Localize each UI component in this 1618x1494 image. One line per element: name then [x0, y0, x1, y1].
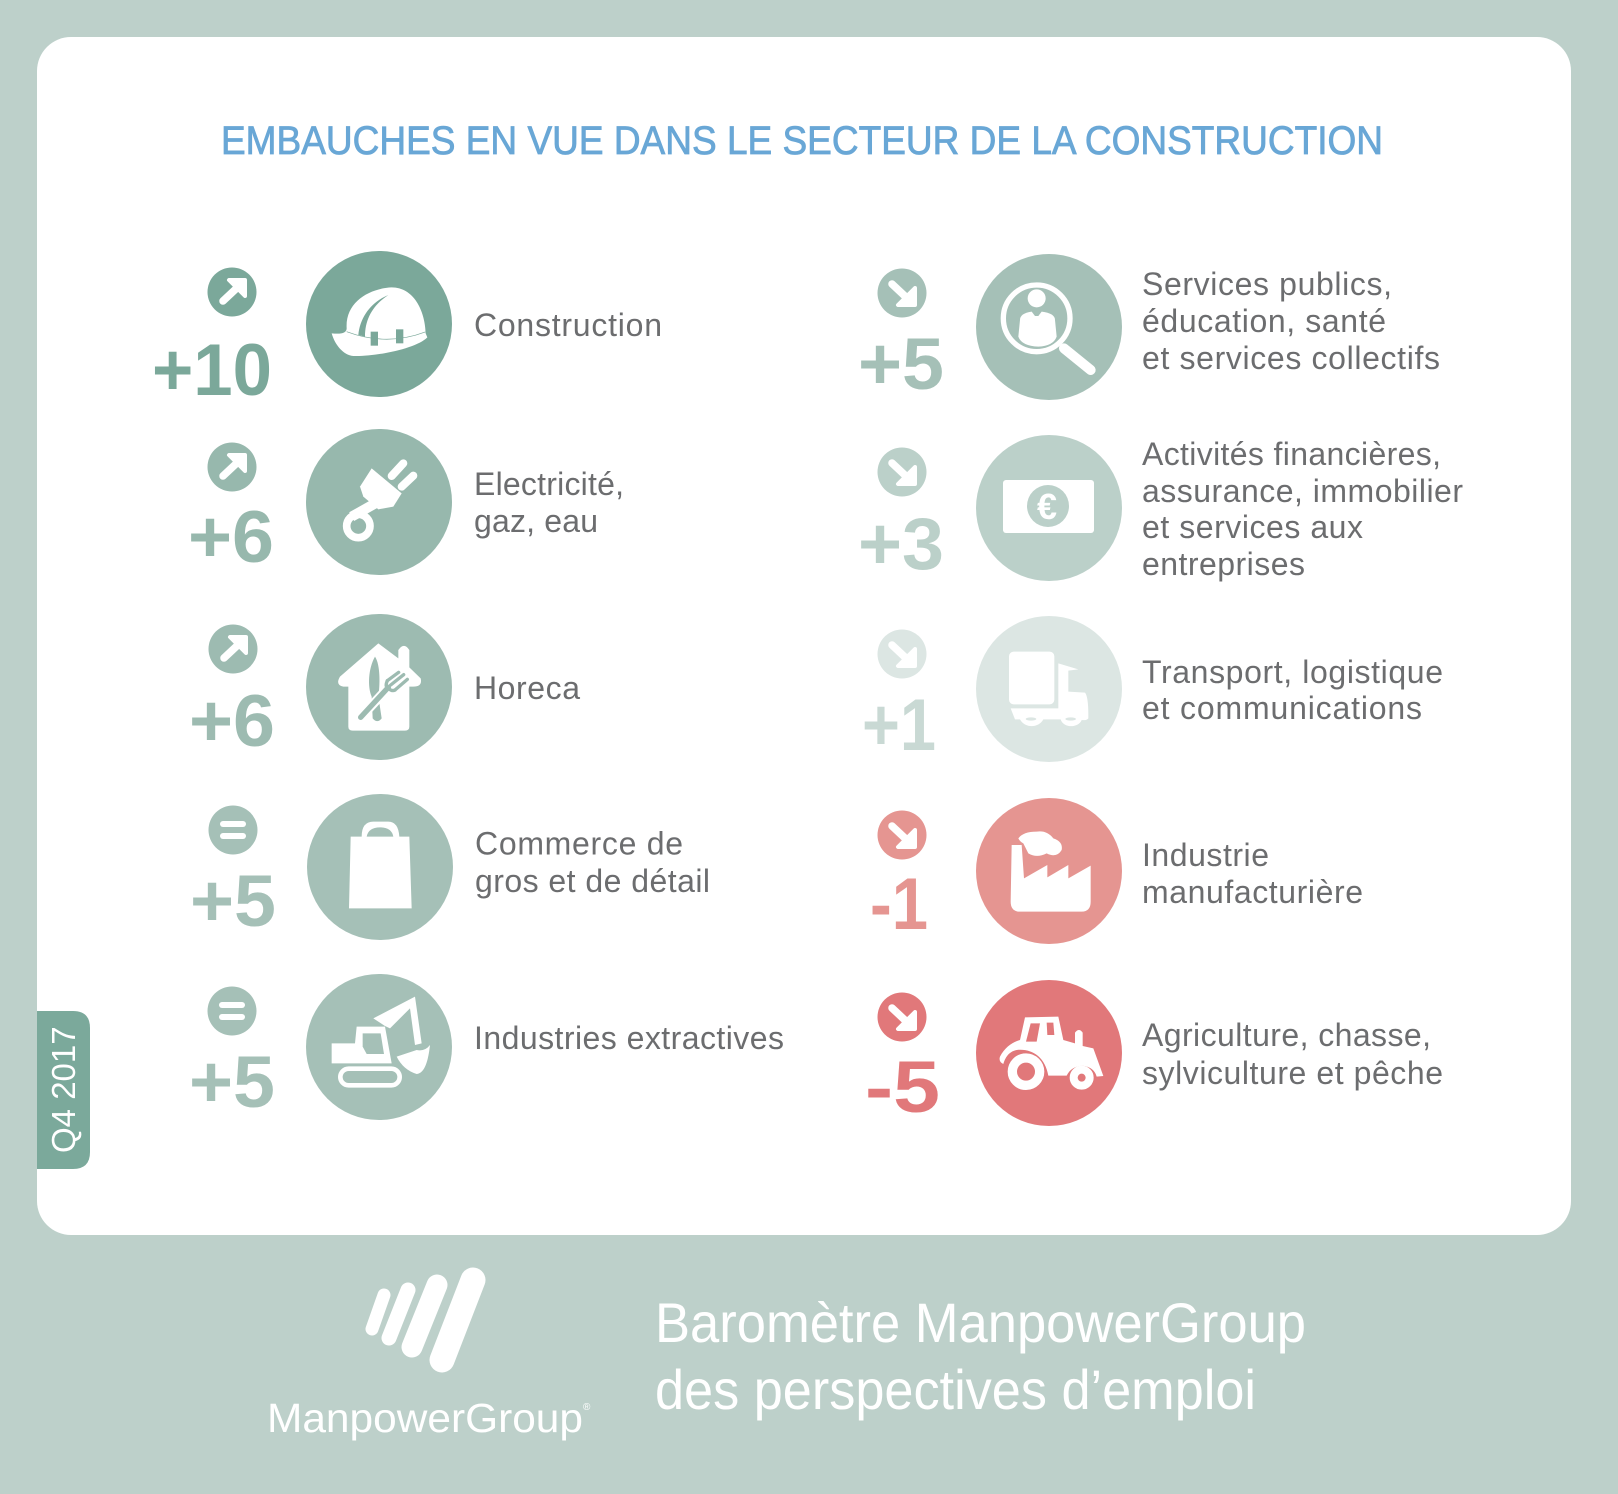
label: Industries extractives	[474, 1020, 784, 1056]
title: EMBAUCHES EN VUE DANS LE SECTEUR DE LA CONSTRUCTION	[221, 119, 1383, 163]
icon: magnifier with person	[976, 254, 1122, 400]
value: +1: +1	[862, 685, 936, 766]
label: gaz, eau	[474, 503, 598, 539]
label: Electricité,	[474, 466, 624, 502]
icon: banknote: €	[1037, 486, 1057, 527]
registered mark: ®	[583, 1402, 591, 1413]
icon: shopping bag	[307, 794, 453, 940]
footer heading: Baromètre ManpowerGroup	[655, 1291, 1306, 1354]
icon: tractor	[976, 980, 1122, 1126]
icon: hard hat	[306, 251, 452, 397]
row: Commerce	[190, 794, 710, 942]
trend badge: down	[878, 630, 926, 678]
value: +6: +6	[188, 497, 274, 578]
row: Agriculture	[865, 980, 1443, 1128]
icon: house with cutlery	[306, 614, 452, 760]
logo wordmark: ManpowerGroup	[267, 1395, 583, 1441]
label: gros et de détail	[475, 863, 710, 899]
label: Services publics,	[1142, 266, 1392, 302]
trend badge: down	[878, 268, 926, 318]
row: Transport	[862, 616, 1443, 766]
label: sylviculture et pêche	[1142, 1055, 1443, 1091]
trend badge: up	[208, 442, 256, 492]
value: +5: +5	[190, 861, 276, 942]
trend badge: down	[878, 448, 926, 496]
value: +3: +3	[858, 504, 944, 585]
label	[1142, 436, 1463, 582]
row: Construction	[152, 251, 662, 411]
value: +10: +10	[152, 330, 272, 411]
footer heading: des perspectives d’emploi	[655, 1358, 1256, 1421]
icon: excavator	[306, 974, 452, 1120]
trend badge: down	[878, 992, 926, 1042]
row: Industrie manufacturière	[870, 798, 1363, 945]
label	[1142, 266, 1440, 376]
label: assurance, immobilier	[1142, 473, 1463, 509]
value: -1: -1	[870, 864, 928, 945]
icon: plug	[306, 429, 452, 575]
icon: factory	[976, 798, 1122, 944]
label: Industrie	[1142, 837, 1269, 873]
label	[1142, 837, 1363, 910]
icon: truck	[976, 616, 1122, 762]
label: Construction	[474, 307, 662, 343]
label	[1142, 1017, 1443, 1091]
icon: banknote	[976, 435, 1122, 581]
row: Electricité	[188, 429, 624, 578]
row: Horeca	[189, 614, 580, 762]
trend badge: up	[208, 268, 256, 316]
footer heading	[655, 1291, 1306, 1421]
label: et communications	[1142, 690, 1422, 726]
value: +5: +5	[858, 324, 944, 405]
label: et services aux	[1142, 509, 1363, 545]
value: -5: -5	[865, 1047, 940, 1128]
side tab: Q4 2017: Q4 2017	[45, 1026, 82, 1153]
panel: white card	[37, 37, 1571, 1235]
value: +6: +6	[189, 681, 275, 762]
row: Services publics	[858, 254, 1440, 405]
label: manufacturière	[1142, 874, 1363, 910]
row: Industries extractives	[189, 974, 784, 1123]
label	[1142, 654, 1443, 726]
side tab: Q4 2017	[37, 1011, 90, 1169]
row: Activités financières	[858, 435, 1463, 585]
label: entreprises	[1142, 546, 1305, 582]
trend badge: equal	[208, 806, 258, 854]
label: Agriculture, chasse,	[1142, 1017, 1431, 1053]
label: Activités financières,	[1142, 436, 1441, 472]
logo mark	[372, 1280, 473, 1360]
logo: ManpowerGroup	[267, 1280, 591, 1441]
label	[474, 466, 624, 539]
label: et services collectifs	[1142, 340, 1440, 376]
label: Commerce de	[475, 826, 683, 862]
label	[475, 826, 710, 899]
label: Horeca	[474, 670, 580, 706]
trend badge: down	[878, 810, 926, 860]
label: Transport, logistique	[1142, 654, 1443, 690]
trend badge: up	[208, 624, 258, 674]
label: éducation, santé	[1142, 303, 1386, 339]
trend badge: equal	[208, 986, 256, 1036]
value: +5: +5	[189, 1042, 275, 1123]
